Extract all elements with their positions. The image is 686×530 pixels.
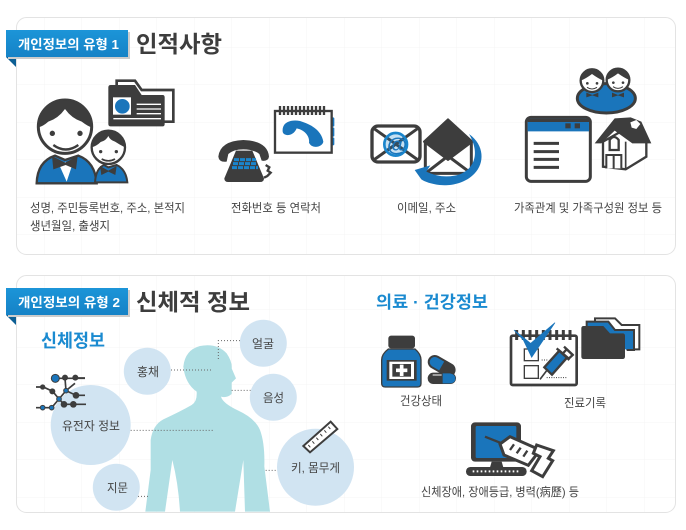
bubble: genetic information xyxy=(51,385,131,465)
caption: medical records: 진료기록 xyxy=(564,396,606,410)
caption: health status: 건강상태 xyxy=(400,394,442,408)
icon: email envelopes: @ xyxy=(387,134,407,157)
bubble: voice: 음성 xyxy=(263,391,284,405)
bubble: fingerprint xyxy=(93,464,140,511)
caption: family: 가족관계 및 가족구성원 정보 등 xyxy=(514,201,662,215)
icon: medicine bottle and pills xyxy=(382,336,457,387)
icon: ruler xyxy=(303,422,337,452)
icon: medical records xyxy=(511,318,639,385)
ribbon: type 2 xyxy=(6,288,130,325)
caption: identity items: 성명, 주민등록번호, 주소, 본적지 xyxy=(30,201,185,215)
subheading: body information: 신체정보 xyxy=(41,331,105,351)
subheading: medical and health: 의료 · 건강정보 xyxy=(376,293,488,312)
panel: physical information xyxy=(6,276,676,512)
icon: adult and child with ID folder xyxy=(37,81,173,183)
bubble: fingerprint: 지문 xyxy=(107,481,128,495)
heading: personal details: 인적사항 xyxy=(136,31,222,57)
bubble: genetic information: 유전자 정보 xyxy=(62,419,120,433)
ribbon: type 1: 개인정보의 유형 1 xyxy=(18,37,119,52)
icon: monitor with syringe xyxy=(466,422,553,477)
heading: physical information: 신체적 정보 xyxy=(136,289,250,315)
caption: phone: 전화번호 등 연락처 xyxy=(231,201,321,215)
caption: disability and medical history: 신체장애, 장애등급, 병력(病歷) 등 xyxy=(421,485,579,499)
bubble: face: 얼굴 xyxy=(252,337,274,351)
caption: birth items: 생년월일, 출생지 xyxy=(30,219,110,233)
icon: gene network xyxy=(36,374,86,410)
caption: email: 이메일, 주소 xyxy=(397,201,456,215)
bubble: iris: 홍채 xyxy=(137,365,159,379)
bubble: height and weight xyxy=(277,429,354,506)
icon: email envelopes xyxy=(372,119,482,185)
bubble: height and weight: 키, 몸무게 xyxy=(291,461,340,475)
icon: telephone and address book xyxy=(218,106,334,182)
ribbon: type 2: 개인정보의 유형 2 xyxy=(18,295,120,310)
ribbon: type 1 xyxy=(6,30,130,67)
dotted leader lines xyxy=(131,341,277,496)
bubble: face xyxy=(240,320,287,367)
figure: human silhouette xyxy=(145,345,270,512)
bubble: voice xyxy=(250,374,297,421)
panel: personal details xyxy=(6,18,676,254)
bubble: iris xyxy=(124,348,171,395)
icon: family, window and house xyxy=(526,69,651,181)
